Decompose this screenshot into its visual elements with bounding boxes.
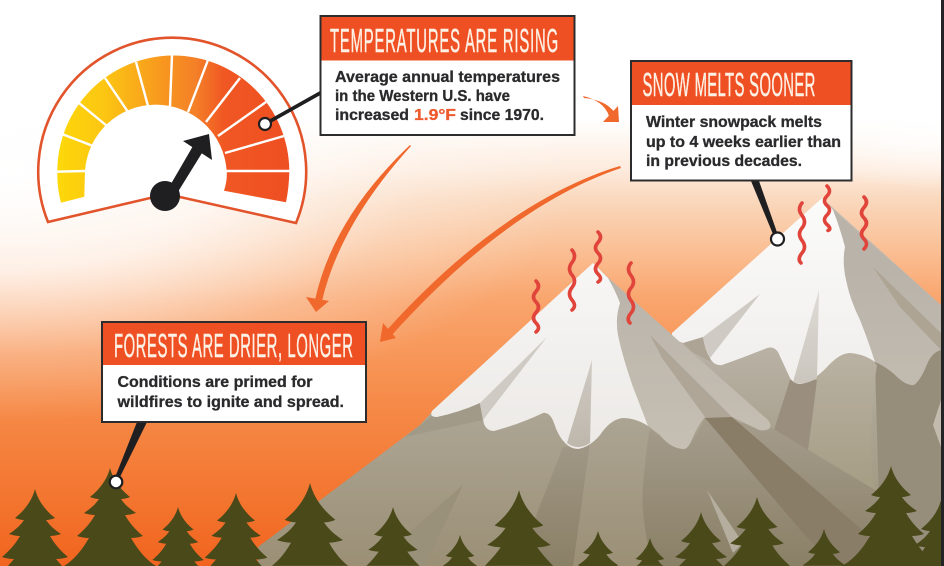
gauge needle — [150, 134, 212, 211]
right edge strip — [941, 0, 944, 566]
callout: snow melts sooner: up to 4 weeks earlier than — [646, 134, 841, 151]
callout: temperatures are rising: TEMPERATURES ARE RISING — [330, 24, 558, 60]
gauge — [38, 38, 306, 223]
heat squiggles: right peak — [799, 186, 866, 263]
pine trees — [2, 466, 941, 566]
arrow: snow to forests — [380, 166, 621, 342]
callout: forests are drier, longer — [102, 322, 366, 488]
right mountain — [640, 198, 941, 566]
callout: temperatures are rising: since 1970. — [460, 107, 544, 124]
gauge outline — [38, 38, 306, 223]
callout: snow melts sooner: Winter snowpack melts — [646, 114, 822, 131]
callout: temperatures are rising: Average annual temperatures — [335, 69, 560, 86]
callout: temperatures are rising — [320, 16, 574, 135]
callout: temperatures are rising: increased — [335, 107, 409, 124]
callout: snow melts sooner — [631, 61, 852, 246]
callout: forests are drier, longer: wildfires to ignite and spread. — [116, 394, 344, 411]
callout: temperatures are rising: 1.9°F — [414, 107, 456, 124]
callout: temperatures are rising: in the Western U.S. have — [335, 88, 510, 105]
callout: forests are drier, longer: Conditions are primed for — [118, 374, 312, 391]
arrow: temperatures to forests — [306, 145, 411, 312]
callout: snow melts sooner: in previous decades. — [646, 153, 802, 170]
left mountain — [258, 263, 941, 566]
callout leader: gauge — [259, 92, 322, 130]
callout: forests are drier, longer: FORESTS ARE DRIER, LONGER — [114, 329, 353, 365]
gauge colour band — [56, 55, 290, 203]
heat squiggles: left peak — [534, 232, 634, 332]
callout: snow melts sooner: SNOW MELTS SOONER — [642, 68, 815, 104]
arrow: temperatures to snow — [583, 96, 619, 122]
